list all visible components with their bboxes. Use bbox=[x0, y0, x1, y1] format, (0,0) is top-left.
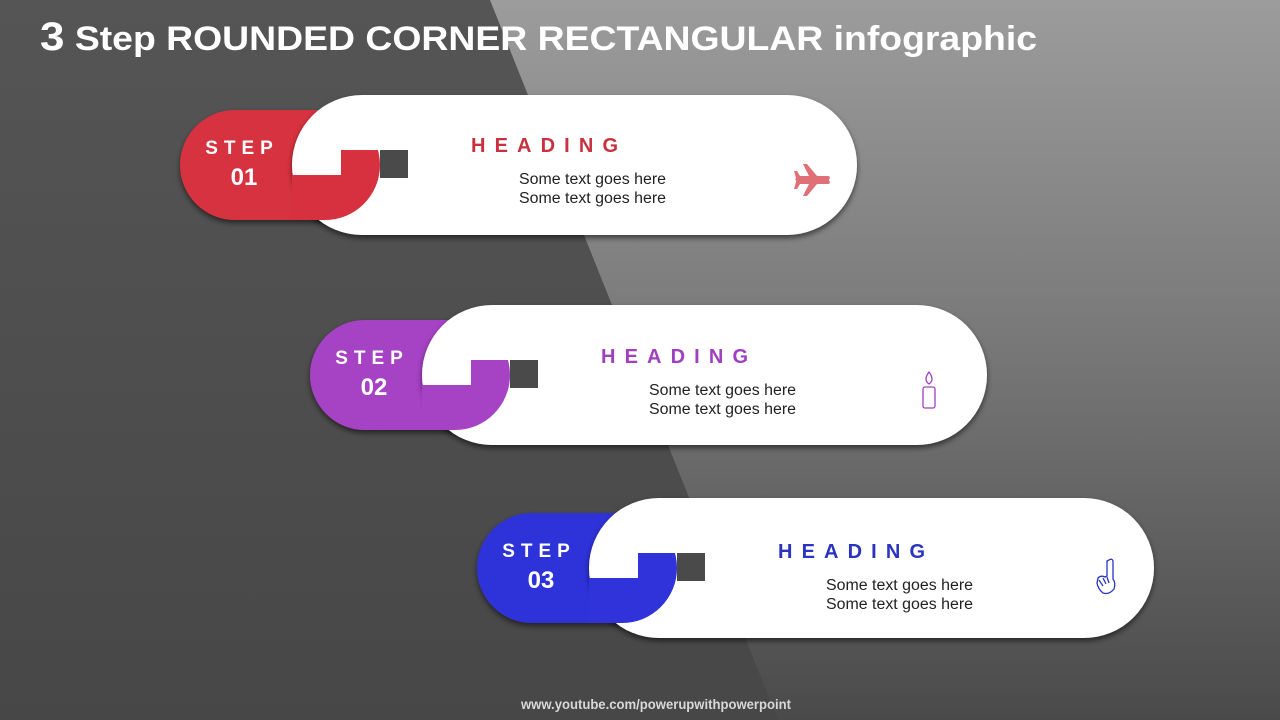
body text 3: Some text goes here bbox=[826, 577, 973, 594]
heading 3: HEADING bbox=[778, 541, 925, 563]
step 3: Some text goes here bbox=[826, 596, 973, 613]
icon: candle bbox=[923, 372, 935, 408]
icon: hand pointing up bbox=[1097, 559, 1115, 594]
step 3 bbox=[477, 498, 1154, 638]
step 1: 01 bbox=[231, 164, 257, 191]
step 1 bbox=[180, 95, 857, 235]
step 2 bbox=[310, 305, 987, 445]
step 2: Some text goes here bbox=[649, 401, 796, 418]
step label 1: STEP bbox=[205, 138, 279, 159]
body text 2: Some text goes here bbox=[649, 382, 796, 399]
body text 1: Some text goes here bbox=[519, 171, 666, 188]
step 1: Some text goes here bbox=[519, 190, 666, 207]
step 2: 02 bbox=[361, 374, 387, 401]
step label 2: STEP bbox=[335, 348, 409, 369]
title: 3 Step ROUNDED CORNER RECTANGULAR infographic bbox=[40, 15, 1037, 59]
footer url: www.youtube.com/powerupwithpowerpoint bbox=[520, 696, 791, 712]
heading 1: HEADING bbox=[471, 135, 618, 157]
step 3: 03 bbox=[528, 567, 554, 594]
icon: airplane bbox=[794, 164, 830, 196]
step label 3: STEP bbox=[502, 541, 576, 562]
heading 2: HEADING bbox=[601, 346, 748, 368]
